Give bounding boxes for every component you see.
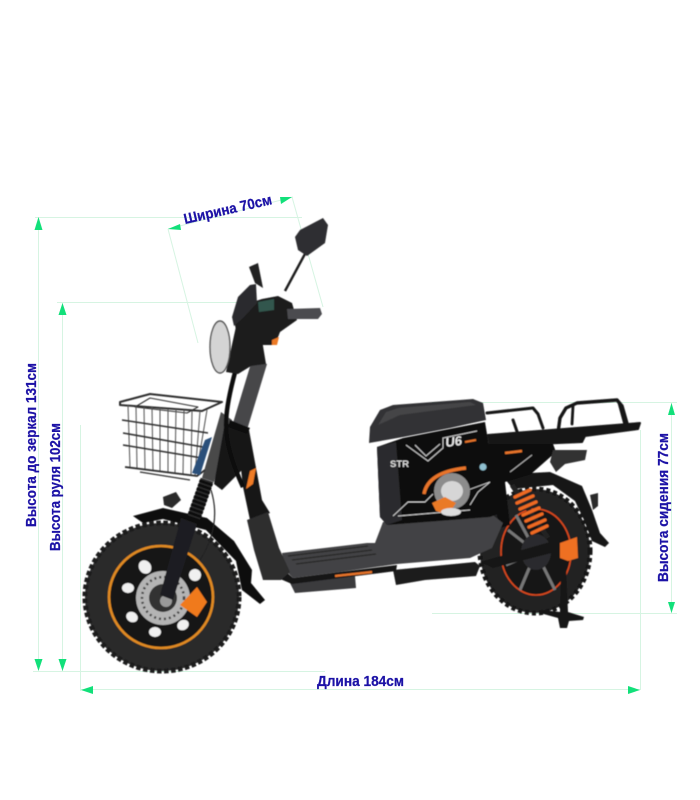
- windshield: [232, 284, 257, 326]
- deck logo: [335, 572, 372, 576]
- front fork: [160, 518, 197, 600]
- floor step: [290, 576, 356, 593]
- turn signal: [163, 492, 181, 508]
- handlebar grip: [287, 308, 322, 319]
- rear shock absorber: [512, 485, 548, 538]
- column clamp: [228, 420, 250, 434]
- frame lower cover: [247, 512, 290, 580]
- dimension guide lines: [33, 197, 677, 691]
- headlight: [210, 321, 266, 374]
- kickstand: [540, 567, 584, 628]
- fork shroud: [214, 422, 242, 490]
- orange reflector: [272, 337, 279, 345]
- front frame tube: [236, 424, 270, 520]
- swing arm: [480, 540, 563, 568]
- brake hose: [226, 352, 243, 487]
- label: width: Ширина 70см: [182, 192, 274, 228]
- front wheel: [85, 523, 239, 671]
- rear fender: [505, 472, 609, 547]
- storage box panel: [377, 422, 500, 525]
- seat highlight: [378, 402, 476, 425]
- basket: [120, 394, 222, 480]
- arrowheads: [34, 197, 675, 694]
- scooter illustration: [85, 218, 640, 671]
- front fender: [133, 508, 265, 604]
- basket mount: [192, 437, 212, 475]
- seat: [369, 399, 486, 443]
- instrument display: [258, 299, 274, 312]
- mudflap: [590, 493, 598, 510]
- label: length: Длина 184см: [317, 674, 404, 690]
- STR label: STR: [390, 459, 409, 470]
- left mirror: [249, 263, 263, 288]
- rear wheel: [480, 489, 590, 613]
- rear rack: [487, 400, 640, 446]
- rear brake caliper: [560, 537, 578, 561]
- steering column: [233, 360, 267, 430]
- frame orange tag: [246, 468, 256, 489]
- brake cable: [200, 490, 215, 560]
- mascot emblem: [424, 468, 470, 516]
- label: handlebar height: Высота руля 102см: [48, 423, 64, 551]
- certification dot: [480, 464, 486, 470]
- rear frame: [486, 444, 556, 528]
- front brake caliper: [180, 587, 207, 617]
- panel graphics: [393, 431, 490, 516]
- right mirror: [285, 218, 328, 291]
- deck sill: [278, 565, 397, 584]
- model badge: U6: [444, 433, 464, 450]
- rear branding: [505, 451, 532, 472]
- lower body and deck: [282, 513, 503, 578]
- model badge: [444, 433, 476, 450]
- label: mirror height: Высота до зеркал 131см: [24, 363, 40, 527]
- footrest underside: [393, 562, 480, 585]
- deck ribs: [288, 546, 376, 564]
- label: seat height: Высота сидения 77см: [656, 433, 672, 582]
- fork spring: [193, 480, 207, 520]
- tail light: [550, 450, 587, 472]
- panel left highlight: [377, 442, 402, 525]
- handlebar controls: [235, 296, 297, 345]
- fork upper tube: [202, 412, 232, 482]
